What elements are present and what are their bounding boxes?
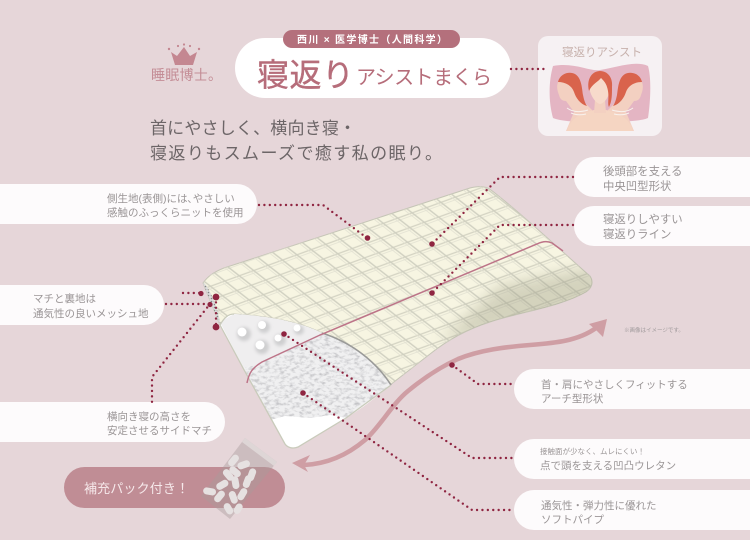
label: マチと裏地: 通気性の良いメッシュ地 — [33, 307, 149, 320]
left head — [557, 82, 592, 131]
badge — [283, 30, 460, 48]
label: サイドマチ — [0, 402, 225, 442]
leader dots — [198, 235, 455, 396]
label: 凹凸ウレタン: 点で頭を支える凹凸ウレタン — [540, 460, 676, 472]
subheading: 首にやさしく、横向き寝・ — [150, 119, 356, 138]
note: ※画像はイメージです。 — [624, 326, 684, 334]
label: 凹凸ウレタン: 接触面が少なく、ムレにくい！ — [540, 446, 645, 456]
label: ソフトパイプ: ソフトパイプ — [541, 514, 604, 526]
label: マチと裏地 — [0, 285, 164, 325]
turn-over line — [247, 242, 563, 383]
title text: 寝返り — [257, 57, 354, 93]
subheading — [150, 119, 442, 163]
logo: 睡眠博士 — [151, 43, 222, 83]
side gusset mesh — [203, 282, 220, 324]
arrow: arch shape — [292, 319, 607, 472]
label: 後頭部: 後頭部を支える — [603, 164, 682, 178]
pillow — [202, 186, 592, 448]
label: 寝返りライン: 寝返りしやすい — [603, 213, 683, 226]
label: サイドマチ: 安定させるサイドマチ — [107, 425, 212, 437]
callout: 補充パック — [64, 467, 285, 508]
icon: crown — [168, 43, 200, 65]
label: マチと裏地: マチと裏地は — [33, 292, 96, 305]
leader lines — [152, 69, 573, 510]
label: アーチ型形状: アーチ型形状 — [541, 392, 604, 405]
badge: 西川 × 医学博士（人間科学） — [297, 33, 447, 46]
shoulders — [567, 110, 633, 131]
label: サイドマチ: 横向き寝の高さを — [107, 410, 191, 423]
subheading: 寝返りもスムーズで癒す私の眠り。 — [150, 144, 442, 163]
right head — [608, 82, 643, 131]
center head — [594, 100, 606, 113]
label: 凹凸ウレタン — [514, 439, 750, 479]
label: 後頭部 — [574, 157, 750, 197]
illustration panel: 寝返りアシスト: 寝返りアシスト — [562, 46, 642, 59]
logo: 睡眠博士: 睡眠博士。 — [151, 67, 222, 83]
label: 側生地: 側生地(表側)には､やさしい — [107, 192, 235, 205]
label: 側生地: 感触のふっくらニットを使用 — [107, 206, 244, 219]
illustration panel: 寝返りアシスト — [538, 36, 662, 136]
label: 後頭部: 中央凹型形状 — [603, 179, 672, 193]
label: ソフトパイプ — [514, 490, 750, 530]
label: 寝返りライン: 寝返りライン — [603, 228, 671, 241]
label: アーチ型形状: 首・肩にやさしくフィットする — [541, 378, 688, 391]
callout: 補充パック: 補充パック付き！ — [84, 481, 189, 496]
soft pipe filling — [244, 333, 390, 420]
label: ソフトパイプ: 通気性・弾力性に優れた — [541, 499, 656, 512]
title pill — [235, 38, 511, 98]
label: 側生地 — [0, 184, 257, 224]
cut-away: inner layers — [220, 314, 390, 448]
icon: refill pack — [201, 438, 277, 519]
label: 寝返りライン — [574, 206, 750, 246]
title subtext: アシストまくら — [356, 67, 492, 89]
label: アーチ型形状 — [514, 369, 750, 409]
urethane bumps — [220, 314, 322, 368]
